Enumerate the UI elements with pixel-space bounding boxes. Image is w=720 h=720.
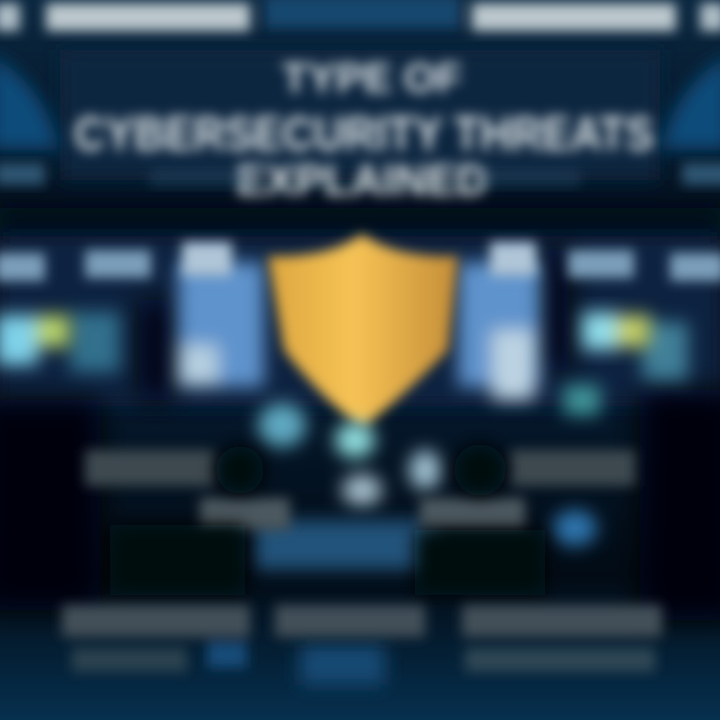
dark side regions	[0, 250, 720, 620]
figure labels	[85, 450, 635, 530]
top navigation bar	[0, 0, 720, 31]
silhouette: right person	[415, 444, 545, 595]
central console	[255, 520, 435, 685]
panel: right threat cards	[458, 262, 688, 415]
title: CYBERSECURITY THREATS	[74, 108, 654, 161]
title: EXPLAINED	[236, 156, 488, 205]
title: TYPE OF	[282, 54, 462, 101]
icon: gold shield	[268, 234, 458, 428]
background band behind title	[0, 50, 720, 406]
icon: right glowing display	[582, 312, 650, 350]
side captions	[0, 163, 720, 186]
silhouette: left person	[110, 446, 264, 595]
corner arcs	[0, 55, 720, 150]
card labels	[0, 242, 720, 281]
bottom threat captions	[62, 605, 662, 672]
icon: glow under shield	[258, 403, 597, 546]
icon: left glowing display	[0, 315, 70, 365]
title	[74, 54, 654, 205]
panel: left threat cards	[70, 262, 264, 387]
